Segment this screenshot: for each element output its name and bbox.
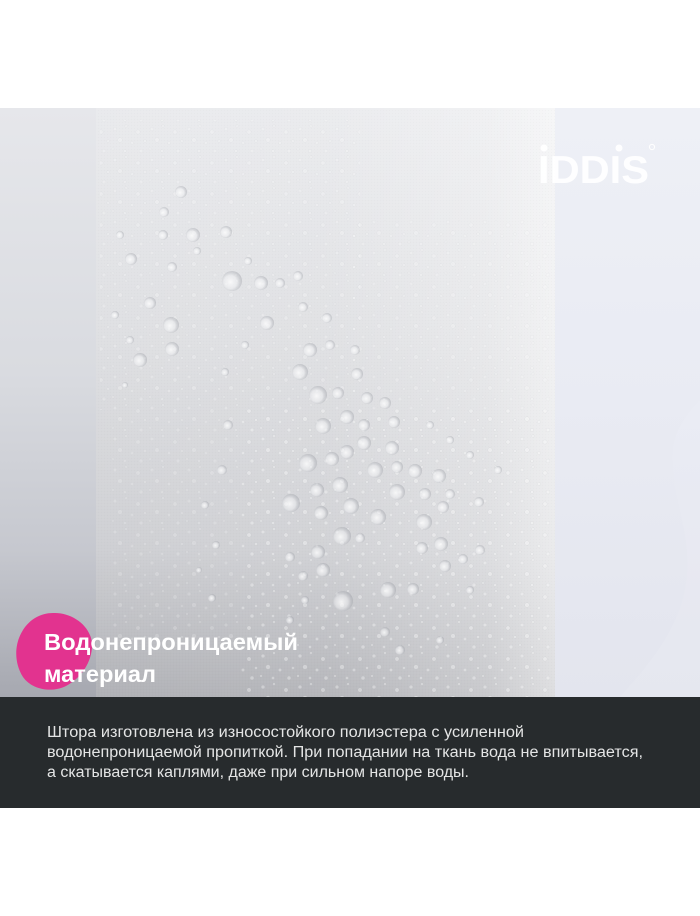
logo i dots xyxy=(540,144,622,152)
heading xyxy=(44,629,298,687)
dark description band xyxy=(0,697,700,808)
logo: IDDIS: IDDIS xyxy=(538,149,649,192)
logo registered mark xyxy=(649,144,655,150)
description text xyxy=(47,724,643,781)
photo: shower curtain fabric with water drops xyxy=(0,108,700,697)
heading: материал xyxy=(44,661,156,687)
pink accent blob xyxy=(16,613,92,690)
description text: водонепроницаемой пропиткой. При попадании на ткань вода не впитывается, xyxy=(47,744,643,761)
description text: Штора изготовлена из износостойкого полиэстера с усиленной xyxy=(47,724,524,741)
heading: Водонепроницаемый xyxy=(44,629,298,655)
water droplets xyxy=(111,186,502,655)
description text: а скатывается каплями, даже при сильном напоре воды. xyxy=(47,764,469,781)
